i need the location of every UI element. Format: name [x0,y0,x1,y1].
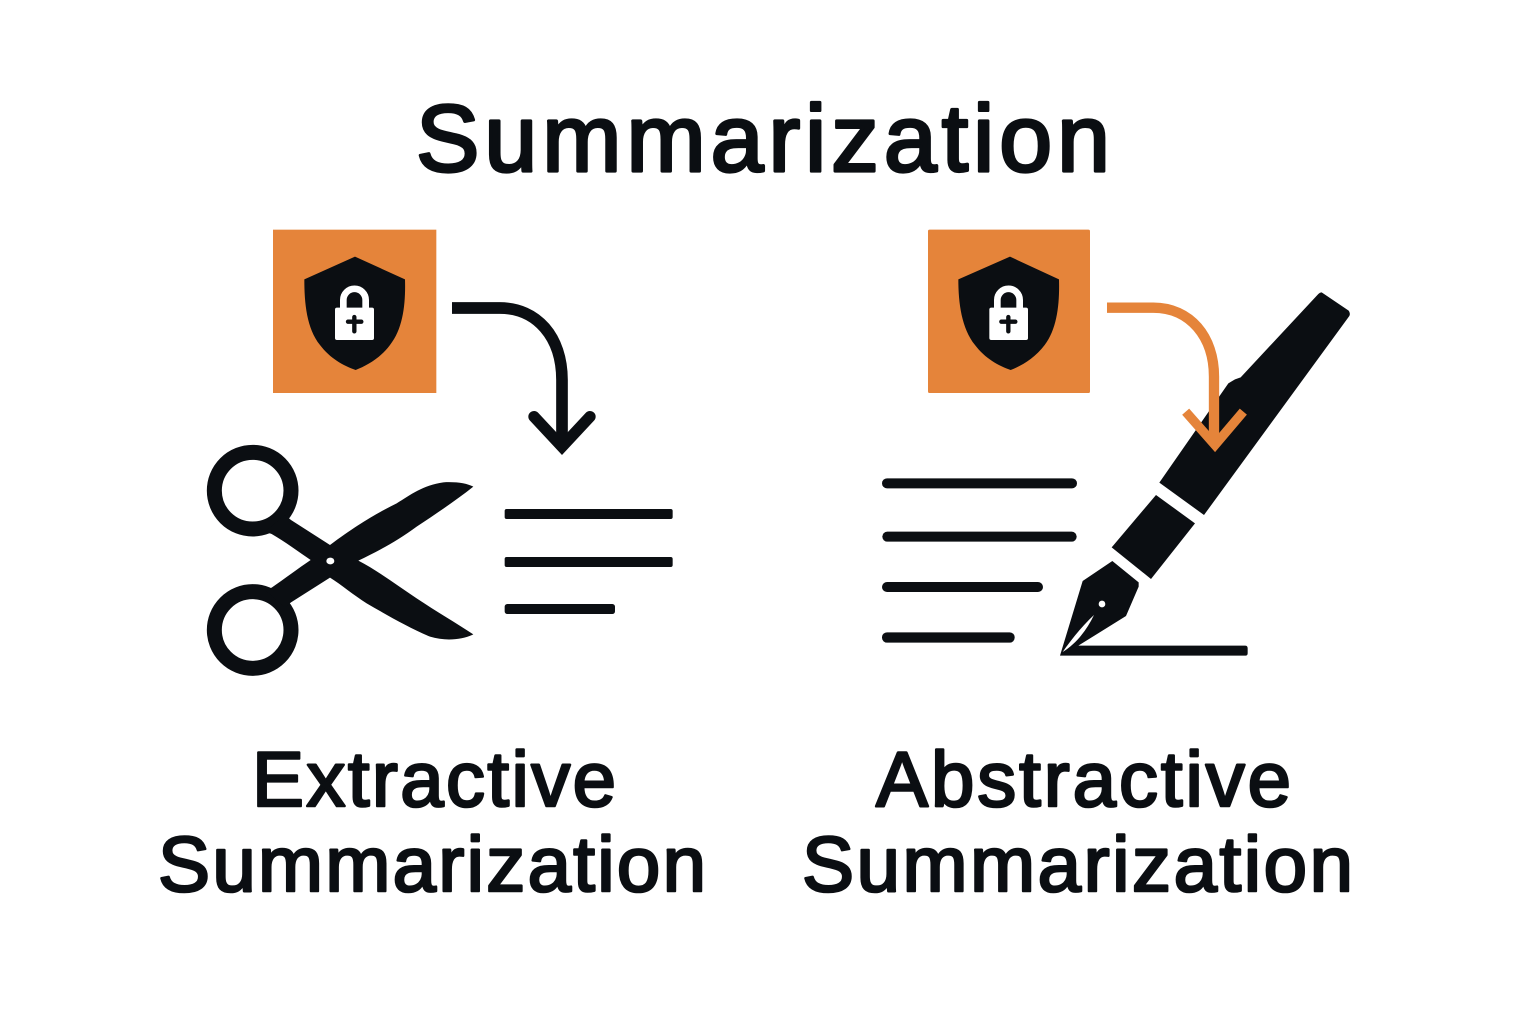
panel: abstractive summarization [802,230,1353,908]
text lines: extracted summary [505,509,673,614]
text lines: rewritten summary [882,478,1077,643]
arrow: orange curved down [1107,308,1243,445]
label: extractive summarization: Summarization [158,820,706,908]
label: extractive summarization: Extractive [252,735,616,823]
icon: orange square with shield and lock [273,230,436,393]
label: extractive summarization [158,735,706,908]
panel: extractive summarization [158,230,706,908]
arrow: black curved down [452,308,590,447]
icon: orange square with shield and lock [928,230,1090,393]
icon: scissors [214,452,473,668]
label: abstractive summarization [802,735,1353,908]
label: abstractive summarization: Summarization [802,820,1353,908]
icon: fountain pen [1060,292,1350,656]
illustration: extractive [214,230,673,668]
title: Summarization [416,86,1110,192]
label: abstractive summarization: Abstractive [876,735,1291,823]
illustration: abstractive [882,230,1350,656]
